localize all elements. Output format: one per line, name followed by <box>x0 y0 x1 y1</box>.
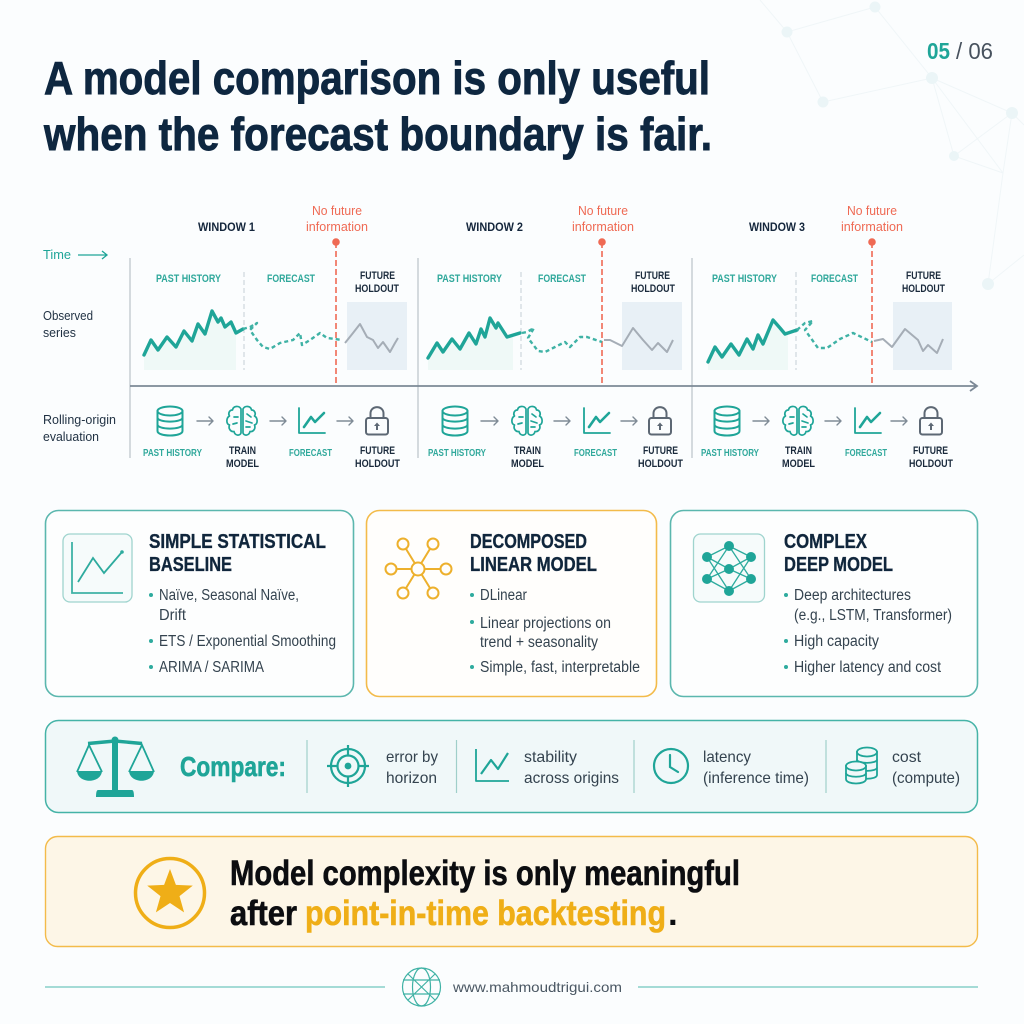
window 2 pipeline: TRAIN <box>514 445 541 457</box>
bullet list: ARIMA / SARIMA <box>159 659 265 676</box>
window 3 pipeline <box>701 406 953 470</box>
callout text: after <box>230 894 297 933</box>
card heading: BASELINE <box>149 554 232 576</box>
title <box>43 52 712 160</box>
time label and arrow: Time <box>43 247 71 262</box>
card heading <box>470 531 597 576</box>
panel: window 3 <box>701 204 953 470</box>
window 2 pipeline: FORECAST <box>574 448 617 459</box>
panel: simple statistical baseline <box>46 510 354 696</box>
window 2 pipeline: FUTURE <box>643 445 678 457</box>
window 2 series chart <box>428 272 682 370</box>
window 2 pipeline <box>428 406 683 470</box>
metric: error by horizon: error by <box>386 749 438 766</box>
panel: window 1 <box>143 204 407 470</box>
window 3 pipeline: HOLDOUT <box>909 458 953 470</box>
title: A model comparison is only useful <box>44 52 710 104</box>
bullet list: Naïve, Seasonal Naïve, <box>159 587 299 604</box>
window 2 phase labels: HOLDOUT <box>631 283 675 295</box>
page number: / 06 <box>956 38 993 64</box>
bullet list <box>149 587 336 676</box>
bullet list: Simple, fast, interpretable <box>480 659 640 676</box>
metric: cost: (compute) <box>892 770 960 787</box>
window 2 pipeline: MODEL <box>511 458 544 470</box>
bullet list: (e.g., LSTM, Transformer) <box>794 607 952 624</box>
footer <box>45 968 978 1006</box>
time label and arrow <box>43 247 107 262</box>
window 1 series chart <box>144 272 407 370</box>
callout text <box>230 854 740 933</box>
metric: error by horizon <box>386 749 438 787</box>
window 3 boundary note: No future <box>847 204 897 218</box>
window 3 pipeline: MODEL <box>782 458 815 470</box>
icon: line chart <box>63 534 132 602</box>
panel: window 2 <box>428 204 683 470</box>
window 3 phase labels: PAST HISTORY <box>712 273 778 285</box>
panel: complex deep model <box>670 510 978 696</box>
card heading <box>149 531 326 576</box>
icon: balance scale <box>77 736 154 797</box>
callout text: . <box>668 894 678 933</box>
window 2 pipeline: HOLDOUT <box>638 458 683 470</box>
window 2 heading: WINDOW 2 <box>466 220 523 234</box>
metric: latency <box>703 749 809 787</box>
compare label: Compare: <box>180 751 286 782</box>
window 2 boundary note: information <box>572 220 634 234</box>
window 3 boundary note <box>841 204 903 386</box>
bullet list <box>784 587 952 676</box>
window 3 heading: WINDOW 3 <box>749 220 805 234</box>
window 3 boundary note: information <box>841 220 903 234</box>
window 1 pipeline <box>143 406 400 470</box>
metric: latency: latency <box>703 749 751 766</box>
bullet list: High capacity <box>794 633 879 650</box>
window 1 pipeline: PAST HISTORY <box>143 448 202 459</box>
window 1 pipeline: HOLDOUT <box>355 458 400 470</box>
card heading <box>784 531 893 576</box>
window 1 phase labels <box>156 270 399 295</box>
window 3 pipeline: TRAIN <box>785 445 812 457</box>
window 2 phase labels <box>437 270 675 295</box>
row label: observed series: series <box>43 325 76 340</box>
window 1 boundary note: No future <box>312 204 362 218</box>
panel: compare bar <box>46 720 978 812</box>
bullet list: Deep architectures <box>794 587 911 604</box>
window 1 pipeline: TRAIN <box>229 445 256 457</box>
icon: target <box>327 745 369 787</box>
window 2 boundary note: No future <box>578 204 628 218</box>
website: www.mahmoudtrigui.com <box>452 979 622 995</box>
icon: stability chart <box>476 749 509 781</box>
bullet list: trend + seasonality <box>480 634 598 651</box>
window 1 pipeline: FORECAST <box>289 448 332 459</box>
window 3 pipeline: FUTURE <box>913 445 948 457</box>
icon: clock <box>654 749 688 783</box>
window 3 pipeline: PAST HISTORY <box>701 448 759 459</box>
metric: cost <box>892 749 960 787</box>
row label: rolling-origin evaluation <box>43 412 116 444</box>
window 1 boundary note: information <box>306 220 368 234</box>
window 2 phase labels: PAST HISTORY <box>437 273 503 285</box>
metric: stability across origins: stability <box>524 749 577 766</box>
window 2 pipeline: PAST HISTORY <box>428 448 486 459</box>
icon: coins <box>846 748 877 784</box>
window 1 phase labels: PAST HISTORY <box>156 273 222 285</box>
page number <box>927 38 993 64</box>
icon: star badge <box>136 858 204 928</box>
title: when the forecast boundary is fair. <box>43 108 712 160</box>
window 1 phase labels: HOLDOUT <box>355 283 399 295</box>
callout text: Model complexity is only meaningful <box>230 854 740 893</box>
window 1 pipeline: FUTURE <box>360 445 395 457</box>
callout text: point-in-time backtesting <box>305 894 666 933</box>
window 1 boundary note <box>306 204 368 386</box>
window 1 phase labels: FORECAST <box>267 273 315 285</box>
bullet list <box>470 587 640 676</box>
card heading: LINEAR MODEL <box>470 554 597 576</box>
icon: hub network <box>386 538 452 598</box>
window 3 phase labels: FORECAST <box>811 273 858 285</box>
row label: rolling-origin evaluation: Rolling-origin <box>43 412 116 427</box>
metric: error by horizon: horizon <box>386 770 437 787</box>
bullet list: Drift <box>159 607 187 624</box>
window 1 heading: WINDOW 1 <box>198 220 255 234</box>
time axis <box>130 381 977 391</box>
card heading: SIMPLE STATISTICAL <box>149 531 326 553</box>
window 2 phase labels: FUTURE <box>635 270 670 282</box>
bullet list: DLinear <box>480 587 527 604</box>
panel: decomposed linear model <box>366 510 656 696</box>
network decoration <box>760 0 1024 290</box>
window 1 phase labels: FUTURE <box>360 270 395 282</box>
window 3 pipeline: FORECAST <box>845 448 887 459</box>
bullet list: ETS / Exponential Smoothing <box>159 633 336 650</box>
metric: stability across origins: across origins <box>524 770 619 787</box>
row label: rolling-origin evaluation: evaluation <box>43 429 99 444</box>
window 2 phase labels: FORECAST <box>538 273 586 285</box>
window 1 pipeline: MODEL <box>226 458 259 470</box>
bullet list: Linear projections on <box>480 615 611 632</box>
card heading: COMPLEX <box>784 531 868 553</box>
metric: latency: (inference time) <box>703 770 809 787</box>
window 3 series chart <box>708 272 952 370</box>
window 2 boundary note <box>572 204 634 386</box>
metric: cost: cost <box>892 749 922 766</box>
bullet list: Higher latency and cost <box>794 659 942 676</box>
callout <box>46 836 978 946</box>
page number: 05 <box>927 38 950 64</box>
metric: stability across origins <box>524 749 619 787</box>
icon: globe logo <box>402 968 440 1006</box>
card heading: DECOMPOSED <box>470 531 587 553</box>
icon: neural network <box>694 534 764 602</box>
window 3 phase labels: HOLDOUT <box>902 283 945 295</box>
window 3 phase labels: FUTURE <box>906 270 941 282</box>
row label: observed series <box>43 308 93 340</box>
window 3 phase labels <box>712 270 945 295</box>
row label: observed series: Observed <box>43 308 93 323</box>
card heading: DEEP MODEL <box>784 554 893 576</box>
